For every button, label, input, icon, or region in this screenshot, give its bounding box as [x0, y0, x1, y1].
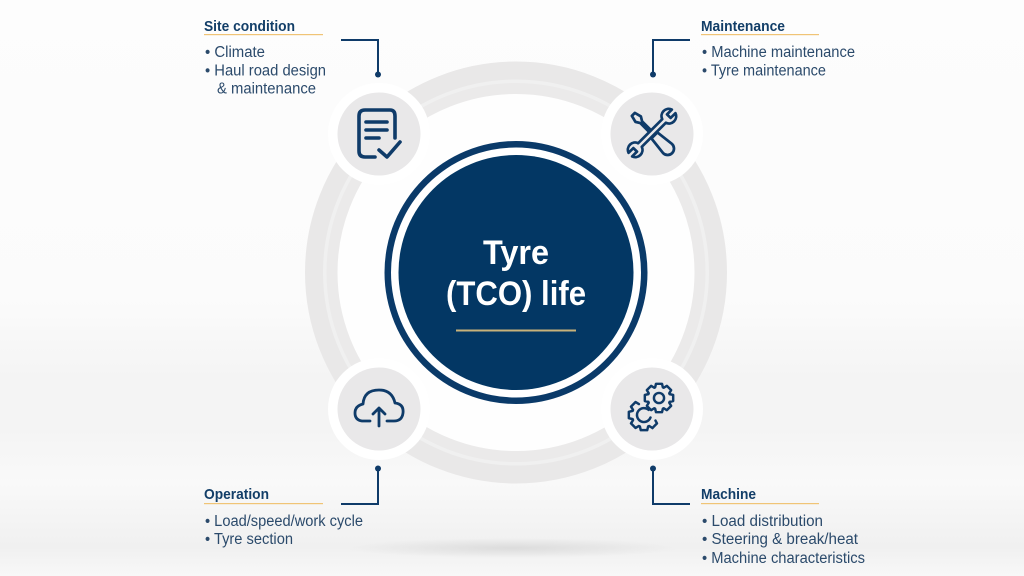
callout: site condition: • Haul road design [205, 62, 326, 80]
callout: site condition: • Climate [205, 44, 265, 61]
callout: maintenance: • Machine maintenance [702, 44, 855, 61]
callout: maintenance: • Tyre maintenance [702, 62, 826, 80]
connector: operation [341, 466, 381, 504]
icon badge: site condition [328, 83, 430, 185]
connector: site condition [341, 40, 381, 78]
central disc: (TCO) life [446, 275, 586, 313]
callout: machine: Machine [701, 486, 756, 503]
callout: operation [204, 486, 363, 548]
floor shadow [347, 538, 677, 558]
large gear [629, 402, 657, 430]
wrench [625, 106, 679, 160]
callout: maintenance [701, 18, 855, 80]
callout: machine [701, 486, 865, 567]
callout: machine: • Load distribution [702, 513, 823, 530]
callout: site condition: Site condition [204, 18, 295, 35]
callout: operation: • Tyre section [205, 531, 293, 548]
callout: site condition: & maintenance [217, 80, 316, 98]
small gear [645, 384, 673, 412]
icon: cloud upload [355, 390, 403, 426]
title underline [456, 330, 576, 332]
ring interior [336, 92, 696, 452]
icon: document with check [359, 110, 400, 157]
icon: gears [629, 384, 673, 430]
icon: crossed tools [625, 106, 679, 160]
callout: operation: Operation [204, 486, 269, 503]
centre title: Tyre [483, 234, 549, 272]
icon badge: machine [601, 358, 703, 460]
screwdriver [629, 110, 677, 158]
connector: machine [650, 466, 690, 504]
callout: machine: • Steering & break/heat [702, 531, 859, 548]
callout: site condition [204, 18, 326, 98]
icon badge: operation [328, 358, 430, 460]
callout: operation: • Load/speed/work cycle [205, 513, 363, 530]
icon badge: maintenance [601, 83, 703, 185]
outer grey ring [321, 78, 711, 468]
callout: maintenance: Maintenance [701, 18, 785, 35]
callout: machine: • Machine characteristics [702, 550, 865, 567]
central disc [384, 141, 648, 404]
connector: maintenance [650, 40, 690, 78]
